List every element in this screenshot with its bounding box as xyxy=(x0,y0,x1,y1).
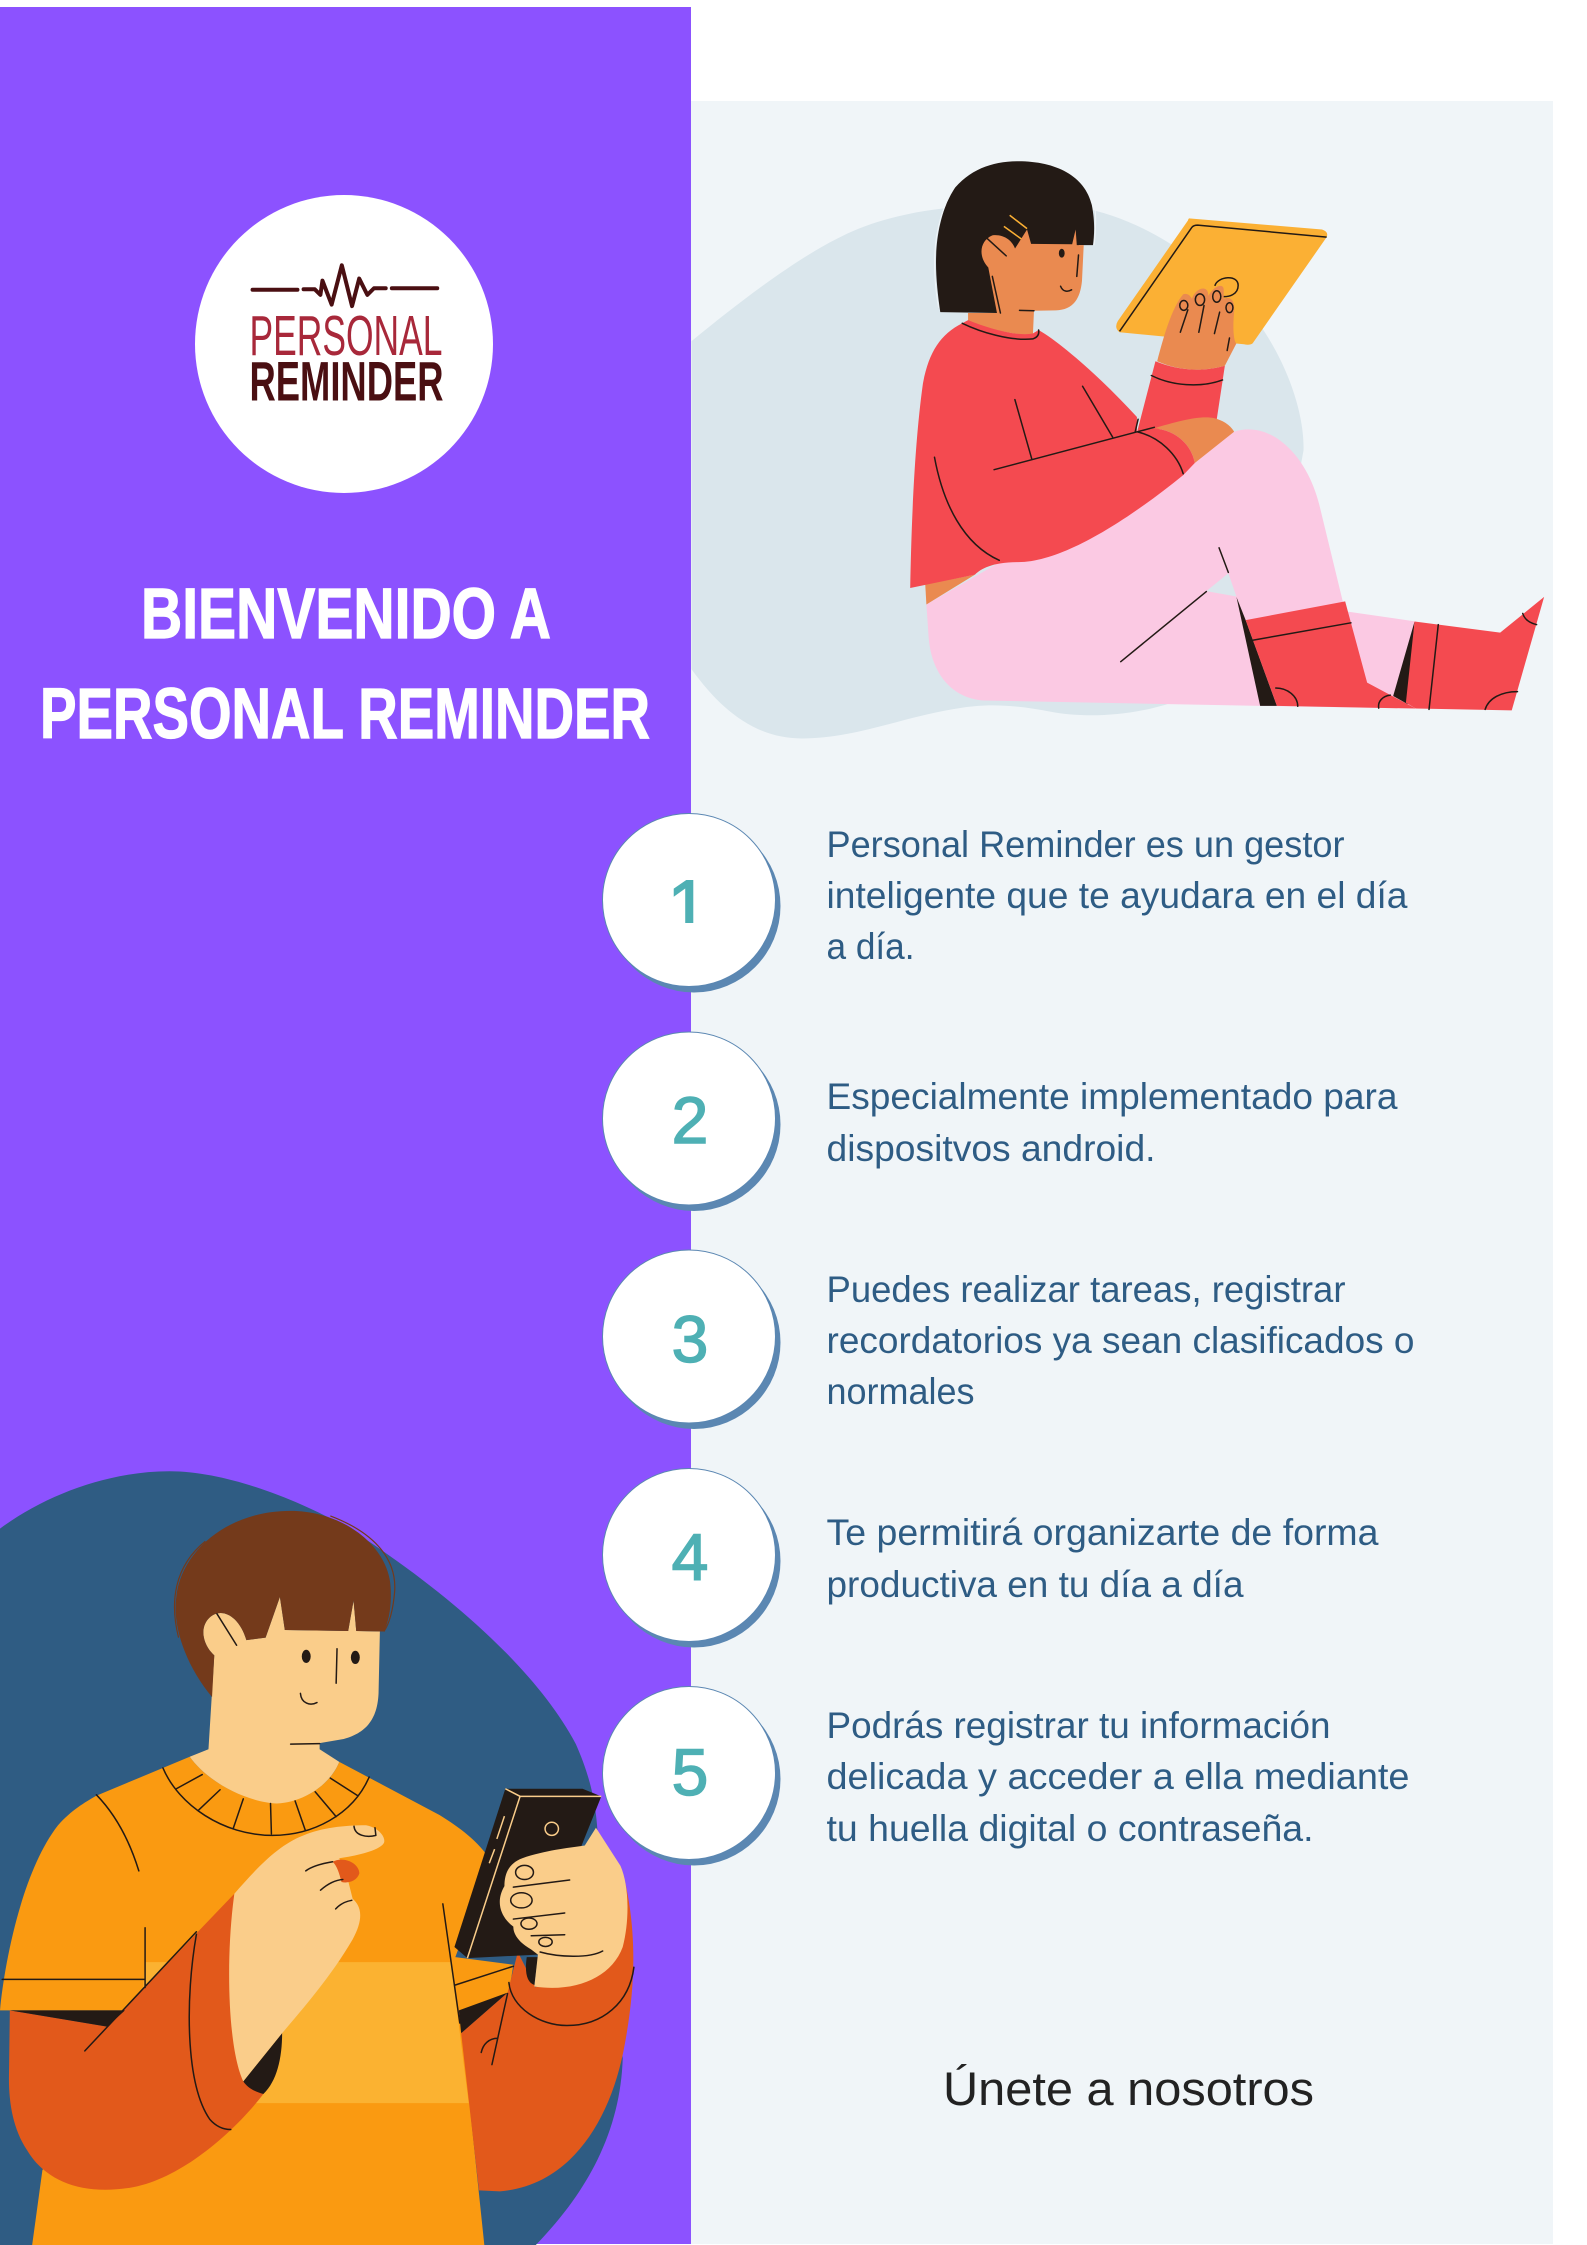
logo heartbeat icon xyxy=(253,265,437,306)
far boot xyxy=(1406,597,1544,710)
illustration: girl with tablet xyxy=(692,161,1544,738)
step 1 text xyxy=(826,824,1408,967)
leg lines xyxy=(1121,548,1228,662)
step 4 xyxy=(602,1468,1379,1648)
step 5 text: Podrás registrar tu información xyxy=(826,1705,1330,1746)
boot shadow xyxy=(1236,597,1277,706)
step 1 xyxy=(602,814,1408,992)
step 1 badge: 1 xyxy=(667,865,709,948)
left arm sleeve xyxy=(9,1894,263,2190)
hand lines xyxy=(306,1826,376,1909)
step 3 text: Puedes realizar tareas, registrar xyxy=(826,1269,1346,1310)
step 2 badge xyxy=(602,1032,780,1211)
pointing hand xyxy=(229,1825,384,2081)
hand on tablet xyxy=(1157,286,1236,370)
holding hand xyxy=(500,1828,628,1988)
step 5 badge xyxy=(602,1686,780,1866)
step 3 badge xyxy=(602,1250,780,1429)
step 5 text: delicada y acceder a ella mediante xyxy=(826,1756,1410,1797)
step 2 text: Especialmente implementado para xyxy=(826,1076,1398,1117)
step 3 xyxy=(602,1250,1414,1429)
logo badge xyxy=(195,195,493,493)
step 3 text: recordatorios ya sean clasificados o xyxy=(826,1320,1414,1361)
logo word: reminder: REMINDER xyxy=(250,350,444,412)
sweater lines xyxy=(934,323,1223,560)
boot lines xyxy=(1253,613,1537,709)
step 4 badge xyxy=(602,1468,780,1648)
shirt lines xyxy=(2,1768,634,2130)
panel: light background xyxy=(691,101,1553,2244)
face details xyxy=(1059,249,1065,258)
step 3 text xyxy=(826,1269,1414,1412)
step 4 text: Te permitirá organizarte de forma xyxy=(826,1512,1379,1553)
holding hand details xyxy=(511,1865,603,1956)
hair xyxy=(936,161,1094,313)
step 1 text: a día. xyxy=(826,926,914,967)
step 5 xyxy=(602,1686,1410,1866)
background blob xyxy=(692,207,1304,738)
call to action: Únete a nosotros xyxy=(943,2062,1314,2115)
panel: purple sidebar xyxy=(0,7,691,2244)
step 2 text: dispositvos android. xyxy=(826,1128,1156,1169)
shirt stripe xyxy=(134,1962,469,2103)
step 5 text xyxy=(826,1705,1410,1849)
skin under sweater xyxy=(925,575,975,605)
shirt xyxy=(0,1757,513,2245)
step 1 text: inteligente que te ayudara en el día xyxy=(826,875,1408,916)
step 5 badge: 5 xyxy=(672,1735,708,1809)
hand on knee xyxy=(1154,417,1234,463)
step 1 text: Personal Reminder es un gestor xyxy=(826,824,1344,865)
sweater xyxy=(910,320,1195,588)
hair xyxy=(176,1511,391,1697)
front boot xyxy=(1246,601,1416,709)
face details xyxy=(217,1614,360,1744)
title: PERSONAL REMINDER xyxy=(40,675,650,754)
head and neck xyxy=(190,1597,380,1803)
title: BIENVENIDO A xyxy=(141,575,551,654)
title xyxy=(40,575,650,754)
fingernail xyxy=(333,1860,359,1882)
face and neck xyxy=(968,230,1084,337)
illustration: boy with phone xyxy=(0,1471,634,2245)
dark blue blob xyxy=(0,1471,623,2245)
step 4 text xyxy=(826,1512,1379,1605)
step 1 badge xyxy=(602,814,780,992)
step 2 xyxy=(602,1032,1398,1211)
finger lines and nails xyxy=(1180,291,1233,351)
step 3 text: normales xyxy=(826,1371,974,1412)
step 4 text: productiva en tu día a día xyxy=(826,1564,1244,1605)
step 2 text xyxy=(826,1076,1398,1169)
step 5 text: tu huella digital o contraseña. xyxy=(826,1808,1314,1849)
shadows xyxy=(10,2010,282,2094)
sweater sleeve far arm xyxy=(1137,361,1225,433)
step 4 badge: 4 xyxy=(672,1520,708,1594)
step 3 badge: 3 xyxy=(672,1302,708,1376)
logo word: personal: PERSONAL xyxy=(250,304,442,368)
right arm sleeve xyxy=(461,1881,633,2191)
pants xyxy=(926,429,1416,709)
far boot shadow xyxy=(1393,621,1415,704)
step 2 badge: 2 xyxy=(672,1083,708,1157)
phone xyxy=(454,1789,601,1958)
tablet xyxy=(1116,218,1327,345)
hair pins xyxy=(1004,215,1027,239)
